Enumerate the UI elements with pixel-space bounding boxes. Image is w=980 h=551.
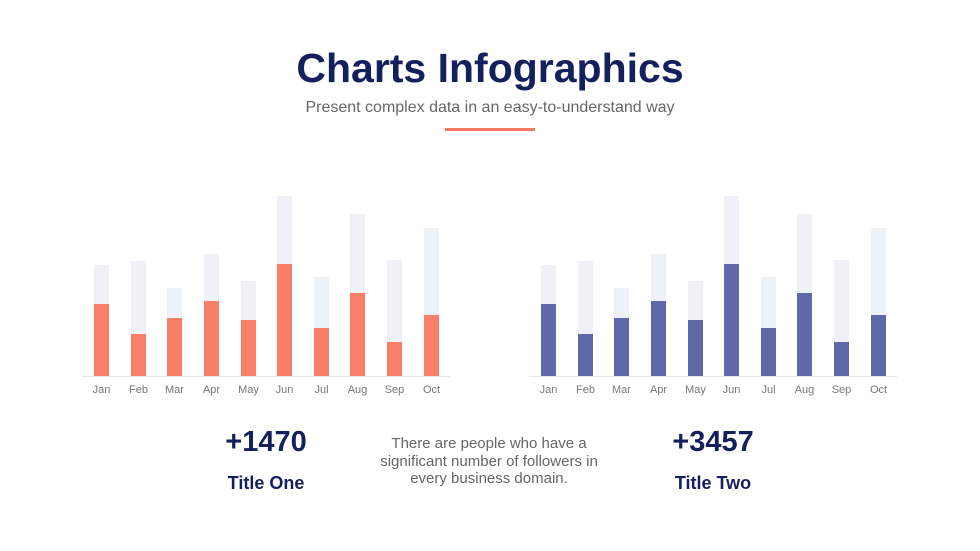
stat: right: Title Two	[675, 473, 751, 493]
stat: right	[672, 426, 754, 493]
chart: right: Sep	[832, 384, 851, 396]
chart: right: Apr	[650, 384, 667, 396]
stat: left: +1470	[225, 426, 307, 458]
chart: left	[82, 196, 450, 396]
chart: right: Feb	[576, 384, 595, 396]
chart: left: Aug	[348, 384, 367, 396]
chart: left: Jul	[314, 384, 329, 396]
chart: right: Jun	[723, 384, 740, 396]
chart: left: May	[238, 384, 259, 396]
chart: left: Oct	[423, 384, 440, 396]
chart: left: Sep	[385, 384, 404, 396]
description text: significant number of followers in	[380, 453, 598, 470]
chart: right	[529, 196, 897, 396]
accent line	[445, 128, 535, 131]
chart: right: Jul	[761, 384, 776, 396]
description text: every business domain.	[410, 470, 568, 487]
description text: There are people who have a	[391, 435, 587, 452]
stat: left: Title One	[228, 473, 304, 493]
title: Charts Infographics	[296, 45, 684, 91]
chart: right: May	[685, 384, 706, 396]
chart: left: Jan	[93, 384, 110, 396]
chart: right: Aug	[795, 384, 814, 396]
chart: left: Mar	[165, 384, 184, 396]
description text	[380, 435, 598, 487]
chart: left: Jun	[276, 384, 293, 396]
subtitle: Present complex data in an easy-to-understand way	[305, 99, 675, 116]
chart: left: Feb	[129, 384, 148, 396]
chart: right: Oct	[870, 384, 887, 396]
chart: right: Jan	[540, 384, 557, 396]
chart: right: Mar	[612, 384, 631, 396]
stat: left	[225, 426, 307, 493]
chart: left: Apr	[203, 384, 220, 396]
stat: right: +3457	[672, 426, 754, 458]
